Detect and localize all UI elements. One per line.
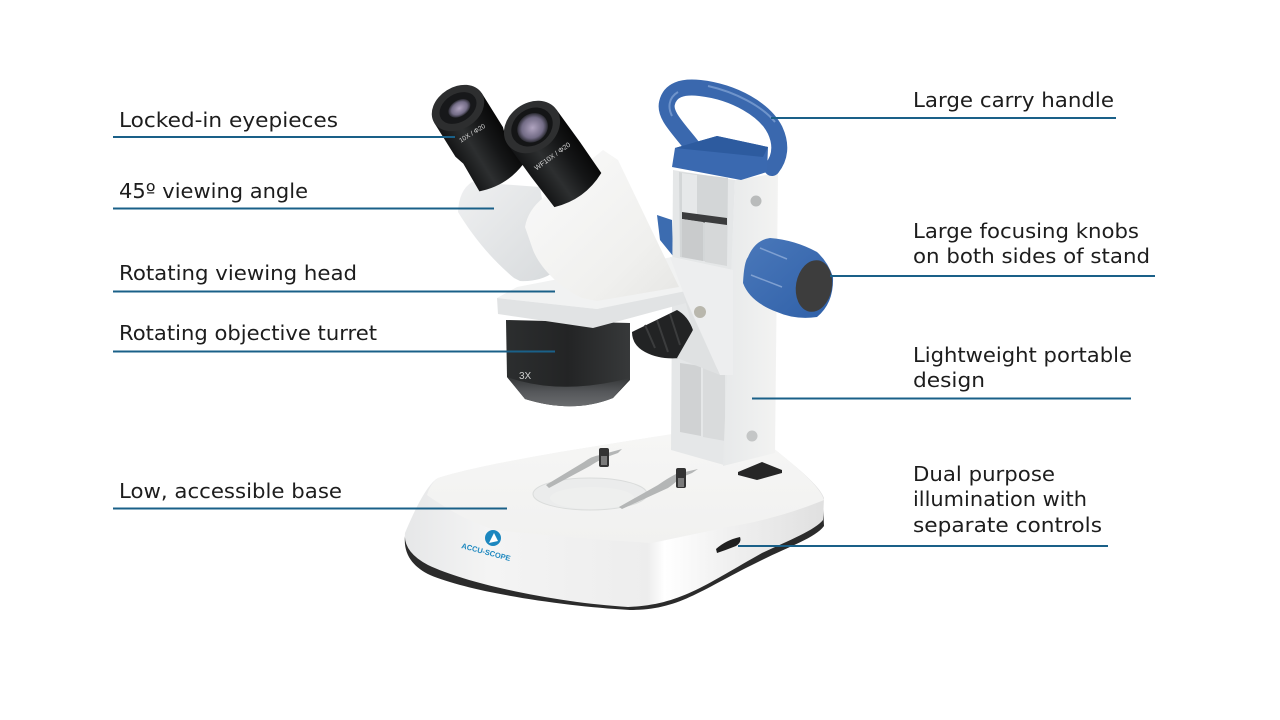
callout: large focusing knobs [830,219,1155,276]
objective housing: 3X [519,371,532,382]
power switch [738,462,782,480]
stage plate [533,478,647,510]
callout: large focusing knobs: Large focusing knobs [913,219,1139,243]
stage clips [546,448,698,509]
rotating head plate [497,257,733,328]
arm bolt [694,306,706,318]
back eyepiece: 10X / Φ20 [458,123,487,144]
callout: locked-in eyepieces: Locked-in eyepieces [119,108,338,132]
callout: viewing angle: 45º viewing angle [119,179,308,203]
callout: rotating objective turret: Rotating objective turret [119,321,377,345]
far focusing knob [657,215,673,256]
front eyepiece: WF10X / Φ20 [534,142,572,172]
callout: dual purpose illumination: illumination with [913,487,1087,511]
callout: large focusing knobs: on both sides of stand [913,244,1150,268]
callout: lightweight portable design [752,343,1132,398]
front eyepiece [494,90,606,213]
callout: lightweight portable design: design [913,368,985,392]
carry handle [667,86,779,180]
microscope illustration [405,75,836,610]
objective housing [506,320,630,406]
callout: dual purpose illumination: separate controls [913,513,1102,537]
logo: ACCU-SCOPE [460,541,512,563]
callout: low accessible base: Low, accessible base [119,479,342,503]
callout: dual purpose illumination [738,462,1108,546]
base [405,434,824,610]
front tube [525,150,679,301]
illumination wheel [716,537,740,553]
side focus ring [632,310,693,358]
callout: dual purpose illumination: Dual purpose [913,462,1055,486]
handle cap [672,136,768,180]
back tube [458,182,554,281]
focusing knob [743,238,836,318]
callout: lightweight portable design: Lightweight portable [913,343,1132,367]
callout: rotating viewing head: Rotating viewing head [119,261,357,285]
back eyepiece [423,75,528,197]
column arm [670,257,733,375]
callout: large carry handle: Large carry handle [913,88,1114,112]
column [671,170,778,466]
logo [460,530,512,563]
